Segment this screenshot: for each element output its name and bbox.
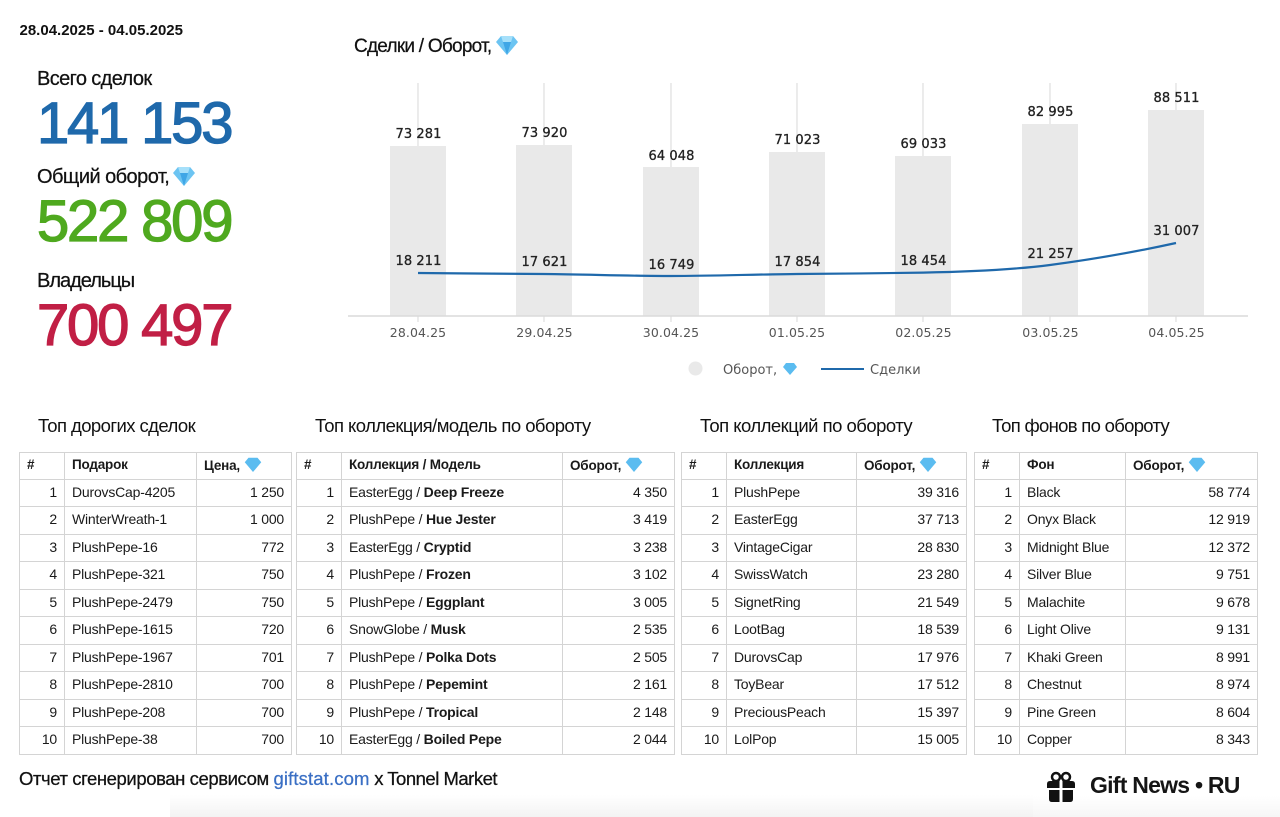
- turnover value labels: 71 023: [774, 133, 821, 148]
- table: top collection/model: 9: [326, 704, 334, 720]
- table: top collections: 8: [711, 676, 719, 692]
- turnover value labels: [395, 91, 1200, 164]
- table: top collections: 5: [711, 594, 719, 610]
- table: top expensive deals: PlushPepe-2479: [72, 594, 173, 610]
- turnover value labels: 64 048: [648, 149, 695, 164]
- table: top backdrops: Light Olive: [1027, 621, 1091, 637]
- table: top expensive deals: 701: [261, 649, 284, 665]
- table: top backdrops: Фон: [1027, 457, 1054, 472]
- table: top collections: Оборот,: [864, 458, 915, 472]
- table: top collection/model: Оборот,: [570, 458, 621, 472]
- table: top collection/model: EasterEgg / Cryptid: [349, 539, 471, 555]
- table: top backdrops: 8: [1004, 676, 1012, 692]
- value: total deals: 141 153: [37, 91, 231, 156]
- table: top expensive deals: PlushPepe-1615: [72, 621, 173, 637]
- table: top expensive deals: PlushPepe-321: [72, 566, 165, 582]
- table: top collections: DurovsCap: [734, 649, 802, 665]
- table: top expensive deals: [19, 452, 292, 755]
- table: top backdrops: 7: [1004, 649, 1012, 665]
- table: top collection/model: Коллекция / Модель: [349, 457, 481, 472]
- table: top collections: LolPop: [734, 731, 776, 747]
- date range: 28.04.2025 - 04.05.2025: [20, 22, 183, 39]
- table: top collections: [681, 452, 967, 755]
- turnover value labels: 82 995: [1027, 105, 1074, 120]
- table: top collections: Коллекция: [734, 457, 804, 472]
- table: top collections: #: [689, 457, 696, 472]
- table: top collection/model: 1: [326, 484, 334, 500]
- table: top backdrops: [974, 452, 1258, 755]
- table: top backdrops: 8 991: [1216, 649, 1250, 665]
- table: top collection/model: PlushPepe / Tropical: [349, 704, 478, 720]
- table: top backdrops: #: [982, 457, 989, 472]
- legend: Сделки: [870, 363, 921, 378]
- table: top collection/model: 2 505: [633, 649, 667, 665]
- table: top collection/model: 7: [326, 649, 334, 665]
- table: top expensive deals: PlushPepe-1967: [72, 649, 173, 665]
- table: top expensive deals: Цена,: [204, 458, 240, 472]
- table: top collections: 9: [711, 704, 719, 720]
- table: top collections: 17 976: [917, 649, 959, 665]
- legend: Оборот,: [723, 363, 777, 378]
- table: top collections: 2: [711, 511, 719, 527]
- table: top backdrops: Black: [1027, 484, 1060, 500]
- turnover value labels: 73 920: [521, 126, 568, 141]
- table: top backdrops: 12 372: [1208, 539, 1250, 555]
- watermark: Gift News RU: [1033, 764, 1280, 817]
- table: top expensive deals: 10: [42, 731, 57, 747]
- table: top expensive deals: 6: [49, 621, 57, 637]
- x axis dates: 29.04.25: [516, 325, 573, 340]
- footer credit: Отчет сгенерирован сервисом giftstat.com x Tonnel Market: [19, 768, 497, 789]
- table: top backdrops: 8 604: [1216, 704, 1250, 720]
- table: top collections: EasterEgg: [734, 511, 798, 527]
- table: top collections: VintageCigar: [734, 539, 812, 555]
- deals value labels: 18 454: [900, 254, 947, 269]
- table: top expensive deals: 2: [49, 511, 57, 527]
- deals line: [418, 243, 1176, 276]
- table: top backdrops: Onyx Black: [1027, 511, 1096, 527]
- table: top collection/model: 8: [326, 676, 334, 692]
- table: top expensive deals: 4: [49, 566, 57, 582]
- deals value labels: 16 749: [648, 258, 695, 273]
- table: top backdrops: 6: [1004, 621, 1012, 637]
- table: top expensive deals: 750: [261, 594, 284, 610]
- table: top collections: SignetRing: [734, 594, 800, 610]
- table: top expensive deals: 720: [261, 621, 284, 637]
- table: top collection/model: EasterEgg / Deep Freeze: [349, 484, 504, 500]
- bottom fade strip: [170, 795, 1280, 817]
- x axis dates: 01.05.25: [769, 325, 825, 340]
- table: top collections: 6: [711, 621, 719, 637]
- heading: top collections: Топ коллекций по обороту: [700, 415, 912, 436]
- table: top backdrops: 4: [1004, 566, 1012, 582]
- table: top backdrops: 8 343: [1216, 731, 1250, 747]
- turnover value labels: 73 281: [395, 127, 442, 142]
- table: top expensive deals: PlushPepe-208: [72, 704, 165, 720]
- deals value labels: [395, 224, 1200, 273]
- table: top backdrops: 9 751: [1216, 566, 1250, 582]
- table: top backdrops: Оборот,: [1133, 458, 1184, 472]
- table: top backdrops: Chestnut: [1027, 676, 1081, 692]
- table: top collection/model: 10: [319, 731, 334, 747]
- table: top backdrops: 5: [1004, 594, 1012, 610]
- value: owners: 700 497: [37, 293, 231, 358]
- chart title: Сделки / Оборот,: [354, 36, 491, 57]
- table: top collections: 17 512: [917, 676, 959, 692]
- table: top collection/model: 5: [326, 594, 334, 610]
- table: top collection/model: PlushPepe / Pepemint: [349, 676, 487, 692]
- turnover value labels: 88 511: [1153, 91, 1200, 106]
- table: top collection/model: 4: [326, 566, 334, 582]
- table: top expensive deals: 1 000: [250, 511, 284, 527]
- x axis dates: 02.05.25: [895, 325, 952, 340]
- table: top expensive deals: 700: [261, 704, 284, 720]
- table: top expensive deals: Подарок: [72, 457, 128, 472]
- table: top collection/model: PlushPepe / Polka Dots: [349, 649, 496, 665]
- table: top collections: 7: [711, 649, 719, 665]
- table: top collection/model: 2 161: [633, 676, 667, 692]
- table: top expensive deals: 700: [261, 731, 284, 747]
- heading: top expensive deals: Топ дорогих сделок: [38, 415, 195, 436]
- table: top collection/model: 3 238: [633, 539, 667, 555]
- table: top collections: LootBag: [734, 621, 785, 637]
- table: top collection/model: [296, 452, 675, 755]
- deals value labels: 21 257: [1027, 247, 1074, 262]
- icon: gift box: [1047, 772, 1075, 802]
- table: top backdrops: Khaki Green: [1027, 649, 1103, 665]
- table: top expensive deals: DurovsCap-4205: [72, 484, 175, 500]
- table: top collection/model: 6: [326, 621, 334, 637]
- legend: [688, 362, 921, 378]
- table: top backdrops: 3: [1004, 539, 1012, 555]
- table: top collection/model: EasterEgg / Boiled Pepe: [349, 731, 502, 747]
- table: top collections: 15 397: [917, 704, 959, 720]
- label: total turnover: Общий оборот,: [37, 166, 169, 188]
- x axis dates: 30.04.25: [643, 325, 699, 340]
- x axis dates: [390, 325, 1205, 340]
- table: top expensive deals: PlushPepe-2810: [72, 676, 173, 692]
- deals value labels: 31 007: [1153, 224, 1200, 239]
- table: top collection/model: PlushPepe / Eggplant: [349, 594, 484, 610]
- table: top backdrops: Midnight Blue: [1027, 539, 1109, 555]
- table: top expensive deals: 772: [261, 539, 284, 555]
- table: top expensive deals: #: [27, 457, 34, 472]
- table: top expensive deals: 3: [49, 539, 57, 555]
- combo chart: turnover bars and deals line: [348, 83, 1248, 378]
- deals value labels: 17 854: [774, 255, 821, 270]
- table: top collections: 10: [704, 731, 719, 747]
- table: top collections: PreciousPeach: [734, 704, 826, 720]
- label: total deals: Всего сделок: [37, 68, 151, 90]
- table: top backdrops: Copper: [1027, 731, 1072, 747]
- deals value labels: 17 621: [521, 255, 568, 270]
- watermark text: Gift News • RU: [1090, 772, 1240, 798]
- x axis dates: 03.05.25: [1022, 325, 1079, 340]
- table: top backdrops: 58 774: [1208, 484, 1250, 500]
- value: total turnover: 522 809: [37, 189, 231, 254]
- table: top backdrops: 8 974: [1216, 676, 1250, 692]
- table: top collections: 39 316: [917, 484, 959, 500]
- table: top expensive deals: PlushPepe-38: [72, 731, 158, 747]
- table: top collections: 28 830: [917, 539, 959, 555]
- table: top backdrops: Pine Green: [1027, 704, 1096, 720]
- table: top collection/model: 2: [326, 511, 334, 527]
- table: top collection/model: 3 005: [633, 594, 667, 610]
- table: top expensive deals: WinterWreath-1: [72, 511, 167, 527]
- table: top collection/model: 3 102: [633, 566, 667, 582]
- table: top expensive deals: 9: [49, 704, 57, 720]
- table: top collections: PlushPepe: [734, 484, 800, 500]
- table: top backdrops: 10: [997, 731, 1012, 747]
- deals value labels: 18 211: [395, 254, 442, 269]
- table: top backdrops: 1: [1004, 484, 1012, 500]
- x axis dates: 04.05.25: [1148, 325, 1205, 340]
- table: top collection/model: #: [304, 457, 311, 472]
- table: top collections: 1: [711, 484, 719, 500]
- table: top expensive deals: 1: [49, 484, 57, 500]
- table: top expensive deals: 750: [261, 566, 284, 582]
- table: top backdrops: 9 678: [1216, 594, 1250, 610]
- table: top collections: SwissWatch: [734, 566, 808, 582]
- table: top backdrops: Malachite: [1027, 594, 1085, 610]
- table: top collection/model: 3 419: [633, 511, 667, 527]
- table: top backdrops: 9: [1004, 704, 1012, 720]
- heading: top backdrops: Топ фонов по обороту: [992, 415, 1169, 436]
- table: top collections: 37 713: [917, 511, 959, 527]
- label: owners: Владельцы: [37, 270, 134, 292]
- x axis dates: 28.04.25: [390, 325, 446, 340]
- table: top collections: 23 280: [917, 566, 959, 582]
- table: top collection/model: 4 350: [633, 484, 667, 500]
- table: top expensive deals: 8: [49, 676, 57, 692]
- heading: top collection/model: Топ коллекция/модель по обороту: [315, 415, 591, 436]
- table: top collections: 4: [711, 566, 719, 582]
- table: top collections: 15 005: [917, 731, 959, 747]
- table: top collections: ToyBear: [734, 676, 784, 692]
- table: top collection/model: PlushPepe / Frozen: [349, 566, 471, 582]
- turnover value labels: 69 033: [900, 137, 947, 152]
- table: top backdrops: 9 131: [1216, 621, 1250, 637]
- table: top collection/model: 2 148: [633, 704, 667, 720]
- table: top expensive deals: 700: [261, 676, 284, 692]
- table: top expensive deals: 7: [49, 649, 57, 665]
- table: top collection/model: 2 535: [633, 621, 667, 637]
- table: top collection/model: SnowGlobe / Musk: [349, 621, 466, 637]
- table: top collections: 21 549: [917, 594, 959, 610]
- table: top collections: 3: [711, 539, 719, 555]
- table: top collection/model: PlushPepe / Hue Jester: [349, 511, 496, 527]
- table: top expensive deals: 5: [49, 594, 57, 610]
- table: top expensive deals: PlushPepe-16: [72, 539, 158, 555]
- table: top collection/model: 3: [326, 539, 334, 555]
- table: top backdrops: 12 919: [1208, 511, 1250, 527]
- table: top backdrops: 2: [1004, 511, 1012, 527]
- turnover bars: [390, 110, 1204, 316]
- table: top collections: 18 539: [917, 621, 959, 637]
- table: top expensive deals: 1 250: [250, 484, 284, 500]
- table: top collection/model: 2 044: [633, 731, 667, 747]
- table: top backdrops: Silver Blue: [1027, 566, 1092, 582]
